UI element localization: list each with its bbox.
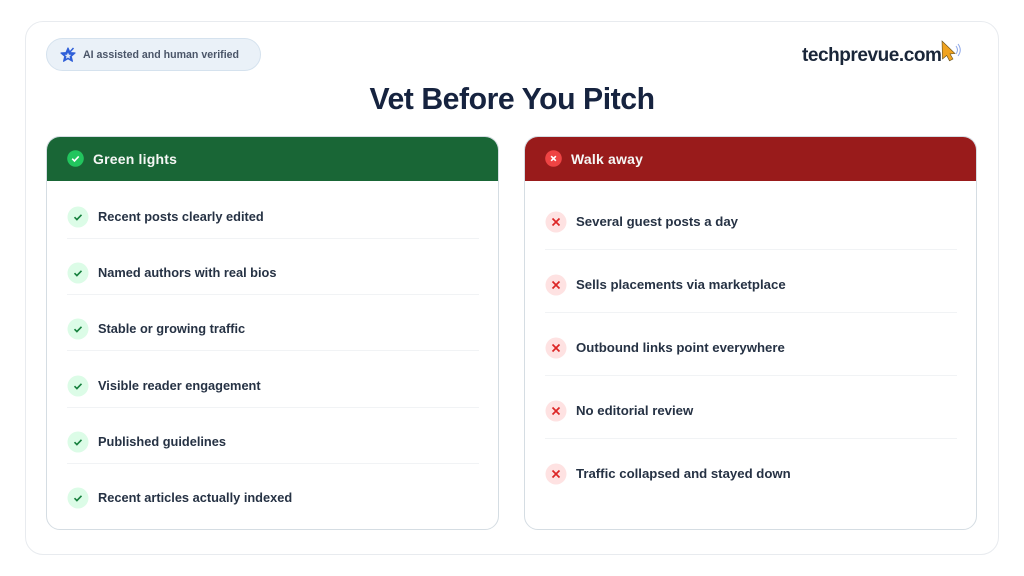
- item: no editorial review: [546, 400, 694, 422]
- item: indexed articles: Recent articles actually indexed: [98, 490, 292, 505]
- panel header: green lights: [45, 135, 502, 181]
- icon: cursor with signal waves: [942, 40, 961, 62]
- panel header: walk away: [523, 135, 980, 181]
- item: traffic collapsed: [546, 464, 791, 484]
- item: outbound links: Outbound links point everywhere: [576, 340, 785, 355]
- item: named authors: Named authors with real bios: [98, 265, 276, 280]
- item: indexed articles: [68, 488, 292, 508]
- item: recent posts: Recent posts clearly edited: [98, 209, 264, 224]
- logo: techprevue.com: techprevue.com: [802, 45, 941, 66]
- panel header: walk away: Walk away: [571, 151, 643, 167]
- item: stable traffic: [68, 318, 245, 340]
- item: several guest posts: Several guest posts a day: [576, 214, 738, 229]
- icon: blue star: [60, 47, 76, 62]
- panel: green lights: [46, 136, 499, 530]
- badge: AI assisted and human verified: AI assisted and human verified: [83, 49, 239, 61]
- item: traffic collapsed: Traffic collapsed and stayed down: [576, 466, 791, 481]
- badge: AI assisted and human verified: [46, 38, 261, 71]
- title: Vet Before You Pitch: [369, 83, 655, 116]
- item: reader engagement: [68, 376, 261, 396]
- item: no editorial review: No editorial review: [576, 403, 693, 418]
- panel header: green lights: Green lights: [93, 151, 177, 167]
- item: recent posts: [68, 206, 264, 228]
- item: outbound links: [546, 338, 785, 358]
- panel: walk away: [524, 136, 977, 530]
- item: stable traffic: Stable or growing traffic: [98, 321, 245, 336]
- item: published guidelines: [68, 432, 226, 452]
- item: sells placements: Sells placements via marketplace: [576, 277, 786, 292]
- item: sells placements: [546, 274, 786, 296]
- icon: green check circle: [67, 150, 84, 167]
- item: published guidelines: Published guidelines: [98, 434, 226, 449]
- item: reader engagement: Visible reader engagement: [98, 378, 261, 393]
- icon: red x circle: [545, 150, 562, 167]
- item: several guest posts: [546, 212, 738, 232]
- item: named authors: [68, 262, 276, 284]
